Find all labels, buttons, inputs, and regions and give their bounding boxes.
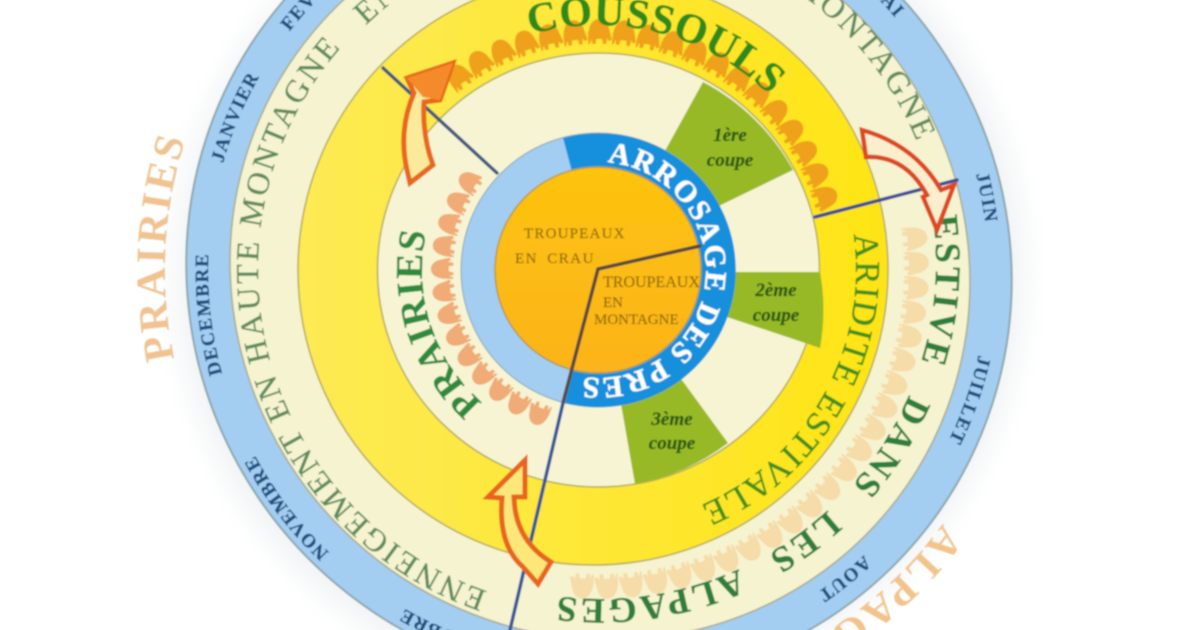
arrow: bottom — [488, 460, 551, 584]
label: 3ème coupe: 3ème — [650, 409, 693, 430]
arrow: upper left — [404, 63, 453, 183]
dark blue irrigation arc — [563, 133, 736, 407]
month labels: AOUT — [820, 554, 870, 603]
label: 2ème coupe — [753, 280, 800, 326]
sheep: prairies flock — [431, 166, 552, 428]
label: 1ère coupe: 1ère — [713, 125, 747, 146]
month labels: JUIN — [976, 174, 998, 222]
label: 1ère coupe: coupe — [707, 150, 754, 171]
wedge: 2ème coupe — [700, 272, 823, 348]
label: 2ème coupe: 2ème — [754, 280, 797, 301]
inner cream disk — [378, 53, 820, 487]
sheep: alpine flock — [569, 226, 929, 599]
label: troupeaux en crau — [515, 226, 626, 267]
label: arrosage des prés: ARROSAGE DES PRES — [582, 142, 728, 400]
label: troupeaux en montagne: TROUPEAUX — [603, 274, 700, 291]
wedge: 3ème coupe — [615, 350, 728, 484]
label: troupeaux en crau: TROUPEAUX — [524, 226, 626, 242]
wedge: 1ère coupe — [650, 82, 793, 220]
label: 3ème coupe — [649, 409, 696, 454]
label: 1ère coupe — [707, 125, 754, 171]
month labels: JUILLET — [950, 355, 991, 446]
orange central disk — [495, 167, 701, 373]
sheep: coussouls flock — [442, 19, 841, 213]
light blue irrigation ring — [461, 133, 735, 407]
yellow coussouls ring — [298, 0, 888, 565]
label: troupeaux en montagne: MONTAGNE — [594, 312, 679, 328]
label: enneigement left: ENNEIGEMENT EN HAUTE MONTAGNE — [236, 36, 488, 612]
divider lines — [383, 68, 957, 630]
month labels: DECEMBRE — [194, 254, 223, 378]
label: prairies inner: PRAIRIES — [396, 230, 482, 421]
month labels: JANVIER — [211, 73, 260, 164]
label: prairies outer: PRAIRIES — [136, 135, 184, 364]
label: troupeaux en montagne — [594, 274, 700, 328]
month labels — [194, 0, 998, 630]
label: troupeaux en crau: EN CRAU — [515, 251, 595, 267]
label: aridité estivale: ARIDITE ESTIVALE — [702, 234, 880, 526]
label: 3ème coupe: coupe — [649, 433, 696, 454]
arrow: right — [862, 130, 954, 230]
label: 2ème coupe: coupe — [753, 305, 800, 326]
month labels: NOVEMBRE — [244, 456, 330, 562]
label: estive dans les alpages: ESTIVE DANS LES ALPAGES — [558, 214, 961, 624]
label: troupeaux en montagne: EN — [603, 295, 623, 311]
